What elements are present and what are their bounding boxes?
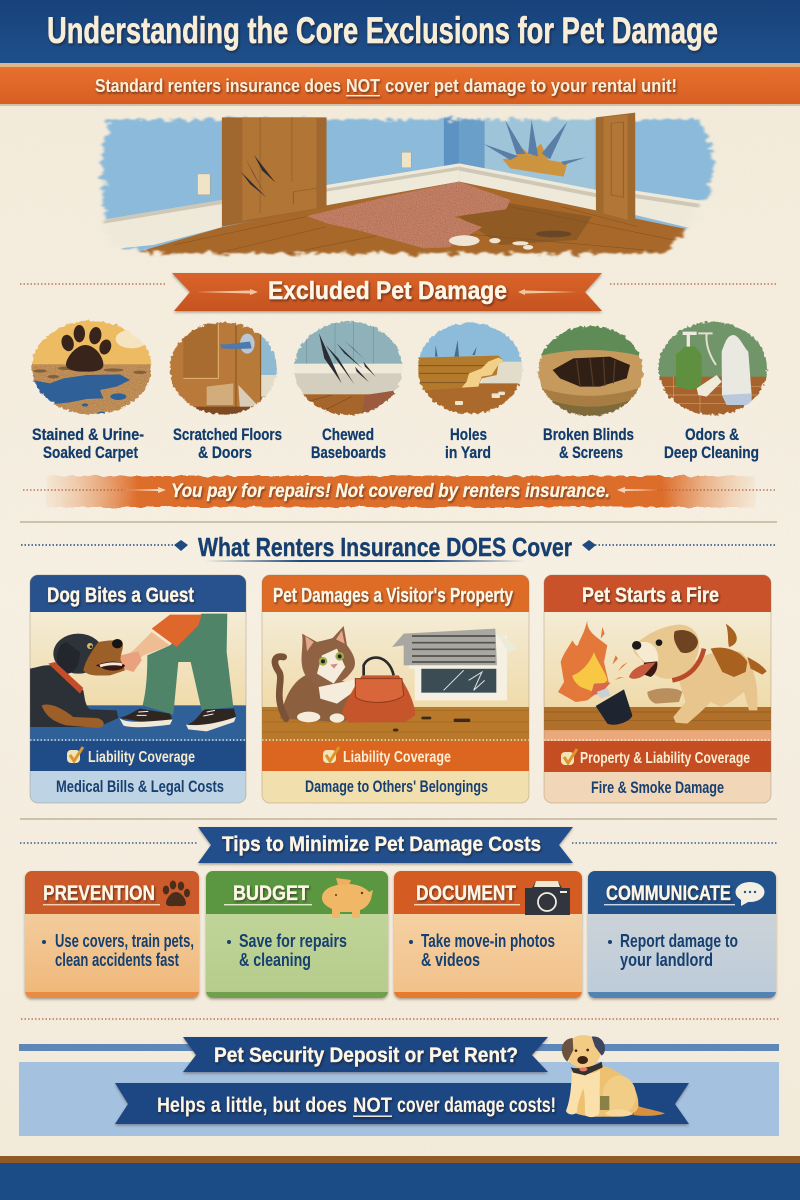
icon: holes in baseboard circle xyxy=(417,322,524,414)
debris xyxy=(449,235,533,250)
icon: chewed baseboard circle xyxy=(294,320,402,416)
floor xyxy=(138,182,688,258)
icon: camera xyxy=(525,881,570,915)
panel: pet damages visitor's property: Damage to Others' Belongings xyxy=(305,777,488,796)
labels: excluded damage items: Scratched Floors xyxy=(173,425,282,444)
labels: excluded damage items: Broken Blinds xyxy=(543,425,634,444)
panel: prevention tip xyxy=(25,871,199,998)
panel: pet starts a fire xyxy=(544,575,774,803)
baseboards xyxy=(102,200,222,248)
panel: pet starts a fire: Property & Liability Coverage xyxy=(580,750,750,767)
panel: prevention tip: Use covers, train pets, xyxy=(55,931,194,951)
banner: Excluded Pet Damage: Excluded Pet Damage xyxy=(268,277,507,305)
panel: pet damages visitor's property: Liability Coverage xyxy=(343,749,451,766)
panel: document tip: & videos xyxy=(421,950,480,970)
subtitle band xyxy=(0,67,800,106)
panel: budget tip: & cleaning xyxy=(239,950,311,970)
banner: tips to minimize costs: Tips to Minimize Pet Damage Costs xyxy=(222,833,541,856)
panel: pet damages visitor's property xyxy=(262,575,532,803)
panel: dog bites a guest xyxy=(30,575,250,803)
panel: communicate tip: Report damage to xyxy=(620,931,738,951)
right door xyxy=(596,113,635,224)
labels: excluded damage items: Odors & xyxy=(685,425,739,444)
illustration: dog biting guest xyxy=(30,612,250,742)
banner: helps a little: NOT xyxy=(353,1094,392,1117)
labels: excluded damage items: & Screens xyxy=(559,443,623,462)
wall hole xyxy=(484,120,586,177)
labels: excluded damage items: Holes xyxy=(450,425,487,444)
banner: pet security deposit question xyxy=(183,1037,548,1072)
divider: tips heading rules xyxy=(20,819,777,843)
check icon xyxy=(323,747,339,763)
banner: tips to minimize costs xyxy=(198,827,573,863)
panel: document tip: Take move-in photos xyxy=(421,931,555,951)
divider: excluded heading rules xyxy=(20,283,777,285)
labels: excluded damage items: Stained & Urine- xyxy=(32,425,144,444)
left door xyxy=(222,117,327,227)
panel: prevention tip: PREVENTION xyxy=(43,882,155,905)
torn carpet xyxy=(307,182,510,248)
labels: excluded damage items: Baseboards xyxy=(311,443,386,462)
subtitle band: Standard renters insurance does xyxy=(95,76,341,96)
header band with title xyxy=(0,0,800,67)
icon: speech bubble xyxy=(736,882,764,906)
illustration: cat and handbag with broken blinds xyxy=(262,612,532,742)
icon: piggy bank xyxy=(322,878,373,918)
callout strip: you pay for repairs xyxy=(23,476,777,507)
panel: pet starts a fire: Pet Starts a Fire xyxy=(582,584,719,607)
panel: document tip xyxy=(394,871,582,998)
panel: dog bites a guest: Dog Bites a Guest xyxy=(47,584,194,607)
subtitle band: cover pet damage to your rental unit! xyxy=(385,76,677,96)
labels: excluded damage items: Soaked Carpet xyxy=(43,443,138,462)
icon: scratched door circle xyxy=(169,321,278,415)
divider: red dotted rule xyxy=(21,1018,779,1020)
panel: prevention tip: clean accidents fast xyxy=(55,950,179,970)
panel: pet damages visitor's property: Pet Damages a Visitor's Property xyxy=(273,585,514,607)
panel: budget tip: Save for repairs xyxy=(239,931,347,951)
panel: communicate tip: COMMUNICATE xyxy=(606,882,731,905)
claw marks on door xyxy=(241,155,276,197)
callout strip: you pay for repairs: You pay for repairs! Not covered by renters insurance. xyxy=(171,481,610,502)
panel: document tip: DOCUMENT xyxy=(416,882,516,905)
banner: helps a little xyxy=(115,1083,689,1124)
icon: sitting dog xyxy=(562,1035,665,1117)
icon: cleaning bottles circle xyxy=(657,315,770,418)
panel: pet deposit note xyxy=(19,1035,779,1136)
check icon xyxy=(67,747,83,763)
icon: stained carpet circle xyxy=(31,320,152,416)
panel: communicate tip xyxy=(588,871,776,998)
labels: excluded damage items: in Yard xyxy=(445,443,491,462)
heading: What Renters Insurance DOES Cover xyxy=(20,522,777,562)
subtitle band: NOT xyxy=(346,76,380,96)
panel: dog bites a guest: Liability Coverage xyxy=(88,749,195,766)
footer band xyxy=(0,1156,800,1200)
puddle xyxy=(459,203,592,245)
labels: excluded damage items: Deep Cleaning xyxy=(664,443,759,462)
labels: excluded damage items: & Doors xyxy=(198,443,252,462)
panel: communicate tip: your landlord xyxy=(620,950,713,970)
banner: pet security deposit question: Pet Security Deposit or Pet Rent? xyxy=(214,1044,518,1067)
panel: budget tip: BUDGET xyxy=(233,882,309,905)
panel: dog bites a guest: Medical Bills & Legal Costs xyxy=(56,777,224,796)
outlets xyxy=(197,174,210,195)
labels: excluded damage items: Chewed xyxy=(322,425,374,444)
hero illustration: damaged rental room xyxy=(96,112,718,258)
banner: Excluded Pet Damage xyxy=(172,273,602,311)
heading: What Renters Insurance DOES Cover: What Renters Insurance DOES Cover xyxy=(198,532,572,562)
icon: paw xyxy=(163,880,190,906)
panel: pet starts a fire: Fire & Smoke Damage xyxy=(591,778,724,797)
panel: budget tip xyxy=(206,871,388,998)
icon: dug hole circle xyxy=(536,325,644,416)
check icon xyxy=(561,749,577,765)
illustration: puppy and fire xyxy=(544,612,774,742)
labels: excluded damage items xyxy=(32,425,759,462)
banner: helps a little: cover damage costs! xyxy=(397,1094,556,1117)
banner: helps a little: Helps a little, but does xyxy=(157,1094,347,1117)
